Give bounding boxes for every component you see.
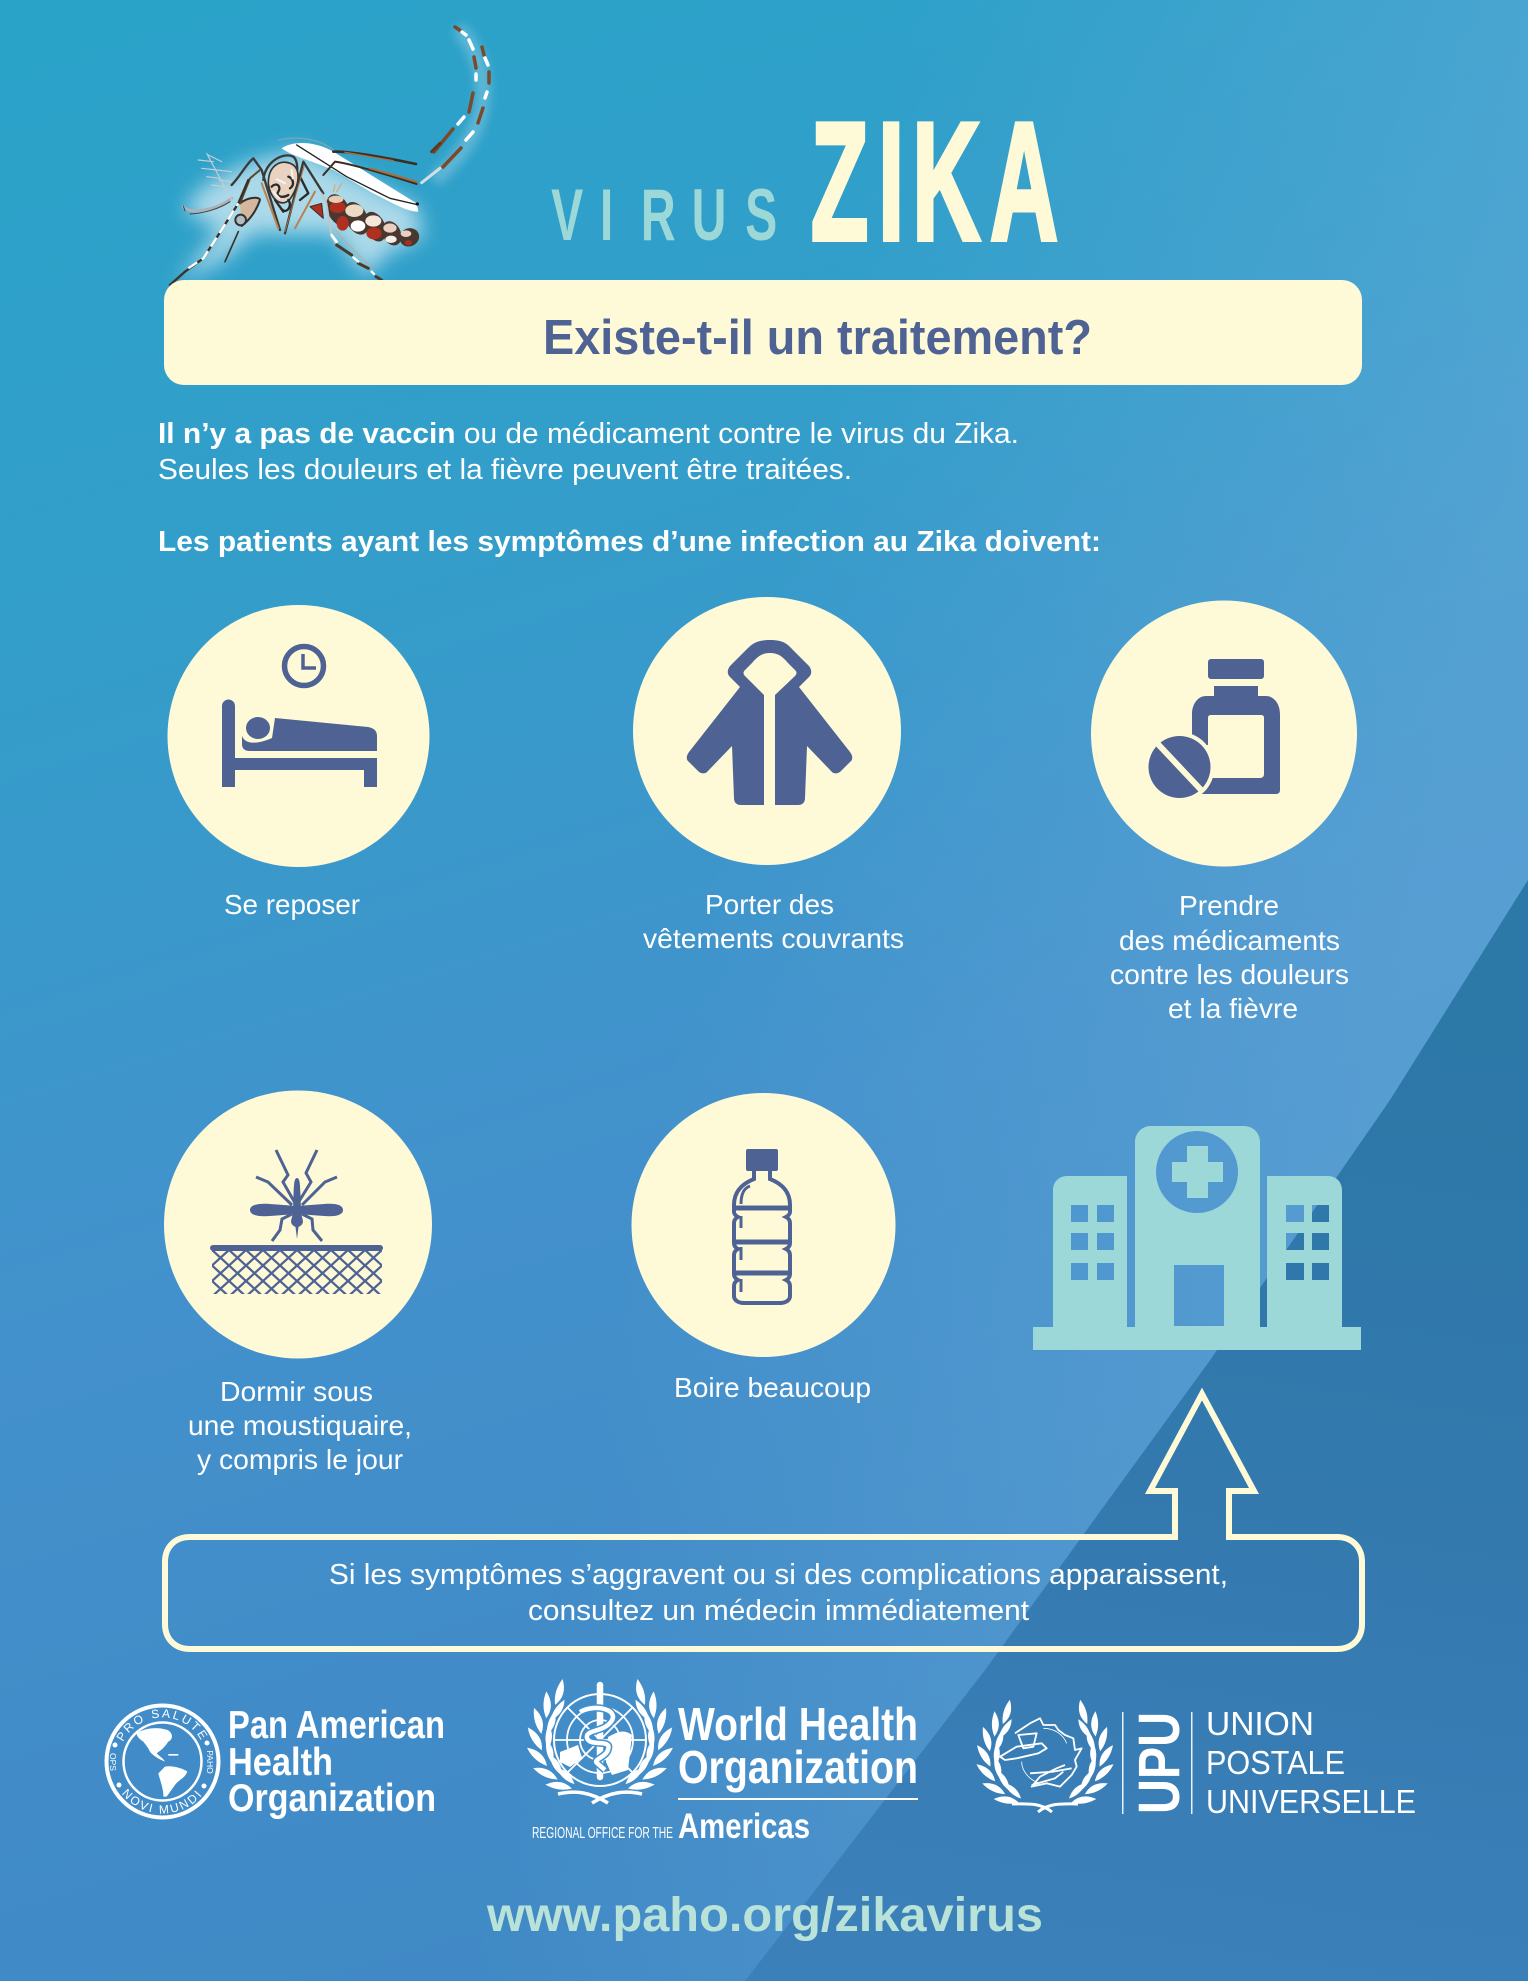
emblem: PRO SALUTE	[116, 1709, 208, 1742]
logo: Pan American Health Organization: Pan American	[228, 1704, 445, 1747]
label: Prendre	[1179, 890, 1279, 921]
item: rest	[168, 605, 430, 920]
emblem	[104, 1704, 220, 1820]
rear legs	[323, 143, 440, 184]
label: des médicaments	[1119, 925, 1340, 956]
curved hind legs	[434, 27, 489, 167]
logo: World Health Organization: Americas	[678, 1807, 810, 1846]
emblem: OPS	[108, 1753, 118, 1771]
arrow callout box	[165, 1394, 1362, 1649]
banner heading: Existe-t-il un traitement?	[543, 311, 1092, 365]
emblem	[976, 1700, 1114, 1812]
callout text	[329, 1559, 1228, 1627]
item: drink	[632, 1093, 896, 1403]
icon: hospital	[1033, 1126, 1361, 1350]
intro text: Il n’y a pas de vaccin ou de médicament contre le virus du Zika.	[158, 418, 1019, 450]
logo: World Health Organization: REGIONAL OFFICE FOR THE	[532, 1825, 673, 1842]
callout text: consultez un médecin immédiatement	[528, 1595, 1029, 1627]
emblem	[527, 1679, 673, 1803]
label: y compris le jour	[197, 1444, 403, 1475]
mosquito illustration	[170, 27, 489, 285]
icon: bed and clock	[222, 646, 377, 787]
label: vêtements couvrants	[643, 923, 904, 954]
label: une moustiquaire,	[188, 1410, 412, 1441]
logo: World Health Organization: Organization	[678, 1741, 918, 1793]
intro text	[158, 418, 1101, 558]
callout text: Si les symptômes s’aggravent ou si des complications apparaissent,	[329, 1559, 1228, 1591]
label	[1110, 890, 1349, 1024]
thorax	[263, 155, 308, 212]
wing	[278, 138, 419, 212]
logo: Pan American Health Organization	[104, 1704, 445, 1820]
abdomen	[310, 183, 422, 250]
item: mosquito net	[164, 1090, 432, 1475]
logo: Union Postale Universelle: UNIVERSELLE	[1206, 1783, 1416, 1820]
intro text: Les patients ayant les symptômes d’une infection au Zika doivent:	[158, 526, 1101, 558]
logo: Union Postale Universelle: POSTALE	[1206, 1744, 1345, 1781]
logo: World Health Organization	[527, 1679, 918, 1846]
item: covering clothes	[633, 597, 904, 954]
mosquito body detail	[170, 138, 440, 285]
logo: Union Postale Universelle: UNION	[1206, 1705, 1314, 1742]
label: Se reposer	[224, 889, 360, 920]
intro text: Seules les douleurs et la fièvre peuvent être traitées.	[158, 454, 852, 486]
front legs	[170, 158, 382, 285]
logo: World Health Organization: World Health	[678, 1698, 918, 1750]
item: medication	[1091, 600, 1357, 1024]
label: Dormir sous	[220, 1376, 373, 1407]
icon: hooded jacket	[687, 640, 852, 805]
label: Boire beaucoup	[674, 1372, 871, 1403]
head, proboscis and antenna	[183, 153, 260, 262]
mosquito glow	[177, 28, 483, 283]
label	[188, 1376, 412, 1475]
logo: Union Postale Universelle: UPU	[1127, 1712, 1192, 1814]
icon: pill bottle and tablet	[1144, 659, 1280, 802]
logo: Union Postale Universelle	[976, 1700, 1416, 1820]
emblem: NOVI MUNDI	[122, 1788, 202, 1814]
website url: www.paho.org/zikavirus	[486, 1889, 1043, 1942]
logo: Pan American Health Organization: Organization	[228, 1777, 436, 1820]
logo: Pan American Health Organization: Health	[228, 1741, 333, 1784]
banner	[164, 280, 1362, 385]
emblem: PAHO	[205, 1750, 215, 1774]
title word: VIRUS: VIRUS	[551, 175, 777, 257]
icon: water bottle	[734, 1149, 790, 1303]
label: et la fièvre	[1168, 993, 1298, 1024]
label: contre les douleurs	[1110, 959, 1349, 990]
title	[551, 88, 1058, 275]
icon: mosquito above net	[210, 1150, 383, 1294]
label: Porter des	[705, 889, 834, 920]
title word: ZIKA: ZIKA	[811, 88, 1058, 275]
label	[643, 889, 904, 954]
